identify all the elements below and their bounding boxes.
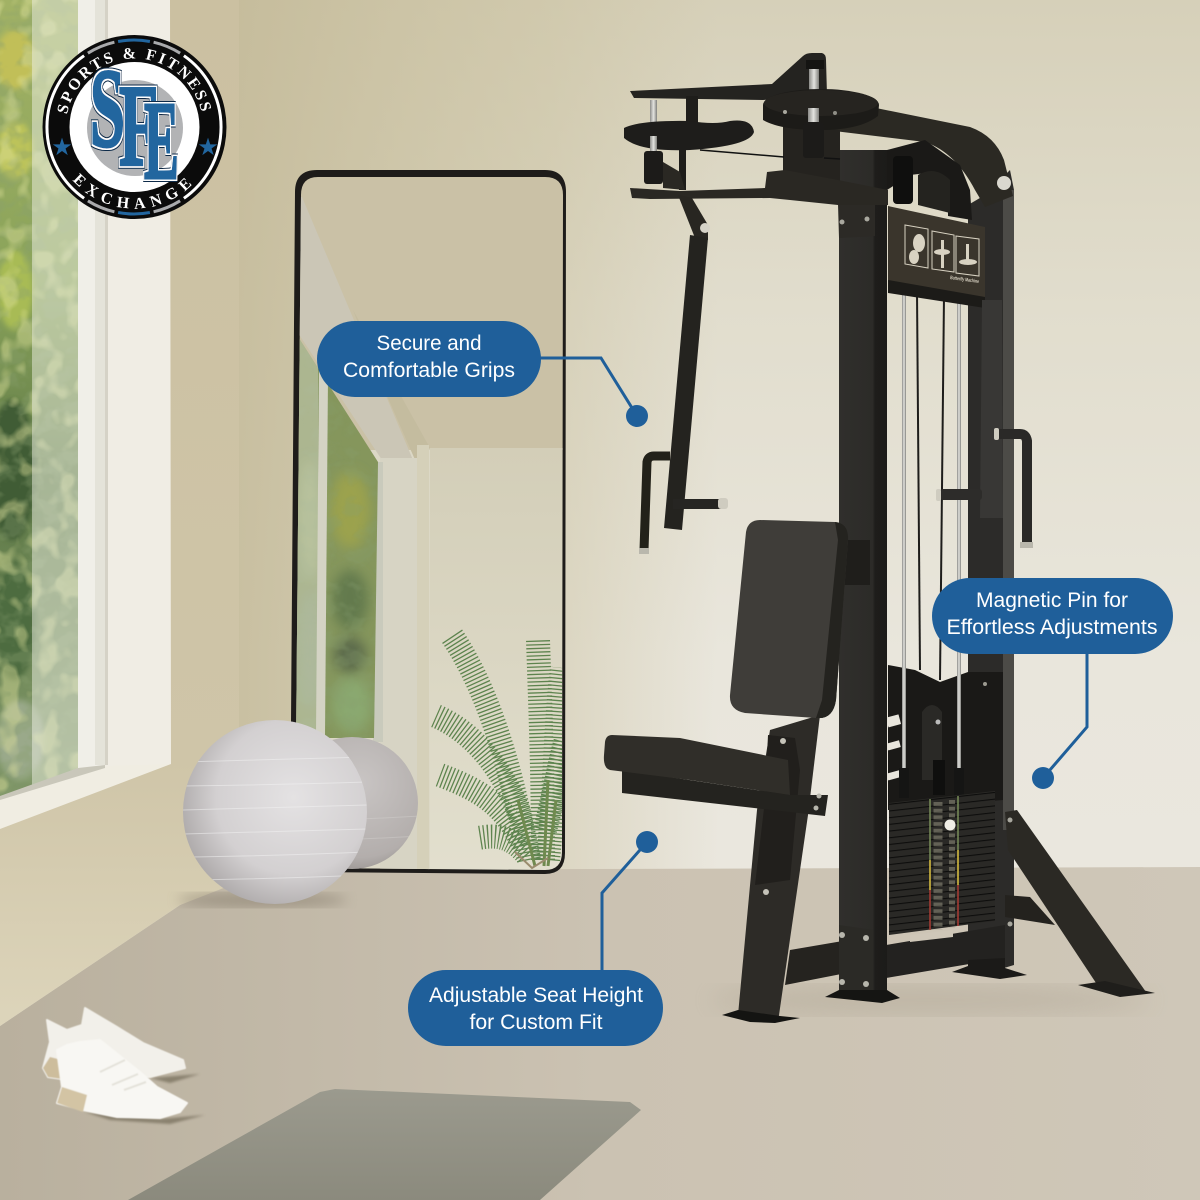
ring text: EXCHANGE [72,172,192,209]
left upright [839,150,887,990]
central block [783,125,840,190]
sheer curtain [32,0,80,800]
pill with text [317,321,541,397]
left pulley [624,96,754,190]
rear foot [952,958,1027,979]
window reveal and sill [0,0,171,829]
pill with text: Comfortable Grips [343,359,515,382]
back wall [0,0,1200,875]
reflected ceiling [290,170,565,450]
right upright [968,170,1014,968]
sneaker shadows [85,1074,205,1124]
reflected window [296,339,378,738]
ring text [58,48,211,209]
pill with text [408,970,663,1046]
rear shoe [43,1008,185,1079]
exercise balls [177,720,420,907]
stars: ★ [197,133,219,161]
ring text: SPORTS & FITNESS [58,48,211,114]
pill with text: Magnetic Pin for [976,589,1128,612]
callout: secure grips [317,321,648,427]
reflected wall [428,448,564,872]
rear ball [332,737,418,869]
reflected window frame [296,197,413,460]
machine floor shadow [710,986,1150,1014]
pill with text: Effortless Adjustments [946,616,1158,639]
butterfly machine [604,53,1155,1023]
seat pad [604,735,828,816]
placard caption: Butterfly Machine [950,275,979,285]
callout: magnetic pin [932,578,1173,789]
rear stabilizer strut [1005,810,1155,997]
SFE monogram: S [90,46,125,171]
floor [0,867,1200,1200]
mirror frame [290,170,566,874]
exercise mat [128,1089,641,1200]
bottom cross rail [886,925,1005,978]
selector bracket [922,705,942,780]
frame arch [826,108,1013,207]
weight stack back plate [886,660,1003,810]
sneakers [43,1008,205,1124]
stars: ★ [51,133,73,161]
left swing arm [664,195,710,530]
logo [42,35,226,219]
front ball [183,720,367,904]
pulley stack behind arch [887,140,972,220]
exercise pictograms [905,225,979,276]
sheer in reflection [296,339,318,730]
guide rods and cables [902,292,961,772]
left arm grips [639,456,728,554]
front shoe [57,1040,187,1118]
SFE monogram: E [144,79,179,202]
right swing arm [980,300,1003,518]
weight stack [889,791,995,935]
connector line and dot [538,358,648,427]
pad bracket [842,540,870,585]
stars [51,133,219,161]
pill with text: for Custom Fit [470,1011,603,1034]
upper cross brace [630,170,888,205]
pill with text [932,578,1173,654]
SFE monogram [90,46,179,202]
back pad [730,520,848,718]
seat post [722,715,820,1023]
window with garden view [0,0,105,800]
right pulley [763,60,879,158]
connector line and dot [602,831,658,974]
seat brace and base [785,925,900,1003]
right arm grips [936,428,1033,548]
logo badge [42,35,226,219]
pill with text: Adjustable Seat Height [429,984,643,1007]
frame pivot cap [997,176,1011,190]
drive cable [700,150,840,159]
placard [888,206,985,308]
side wall [0,0,239,1026]
top pivot arm [630,53,827,100]
mirror [290,170,566,874]
weight pin [944,820,956,830]
callout: adjustable seat [408,831,663,1046]
SFE monogram: F [119,62,158,191]
reflected plant [436,636,566,860]
connector line and dot [1032,650,1087,789]
pill with text: Secure and [376,332,482,355]
